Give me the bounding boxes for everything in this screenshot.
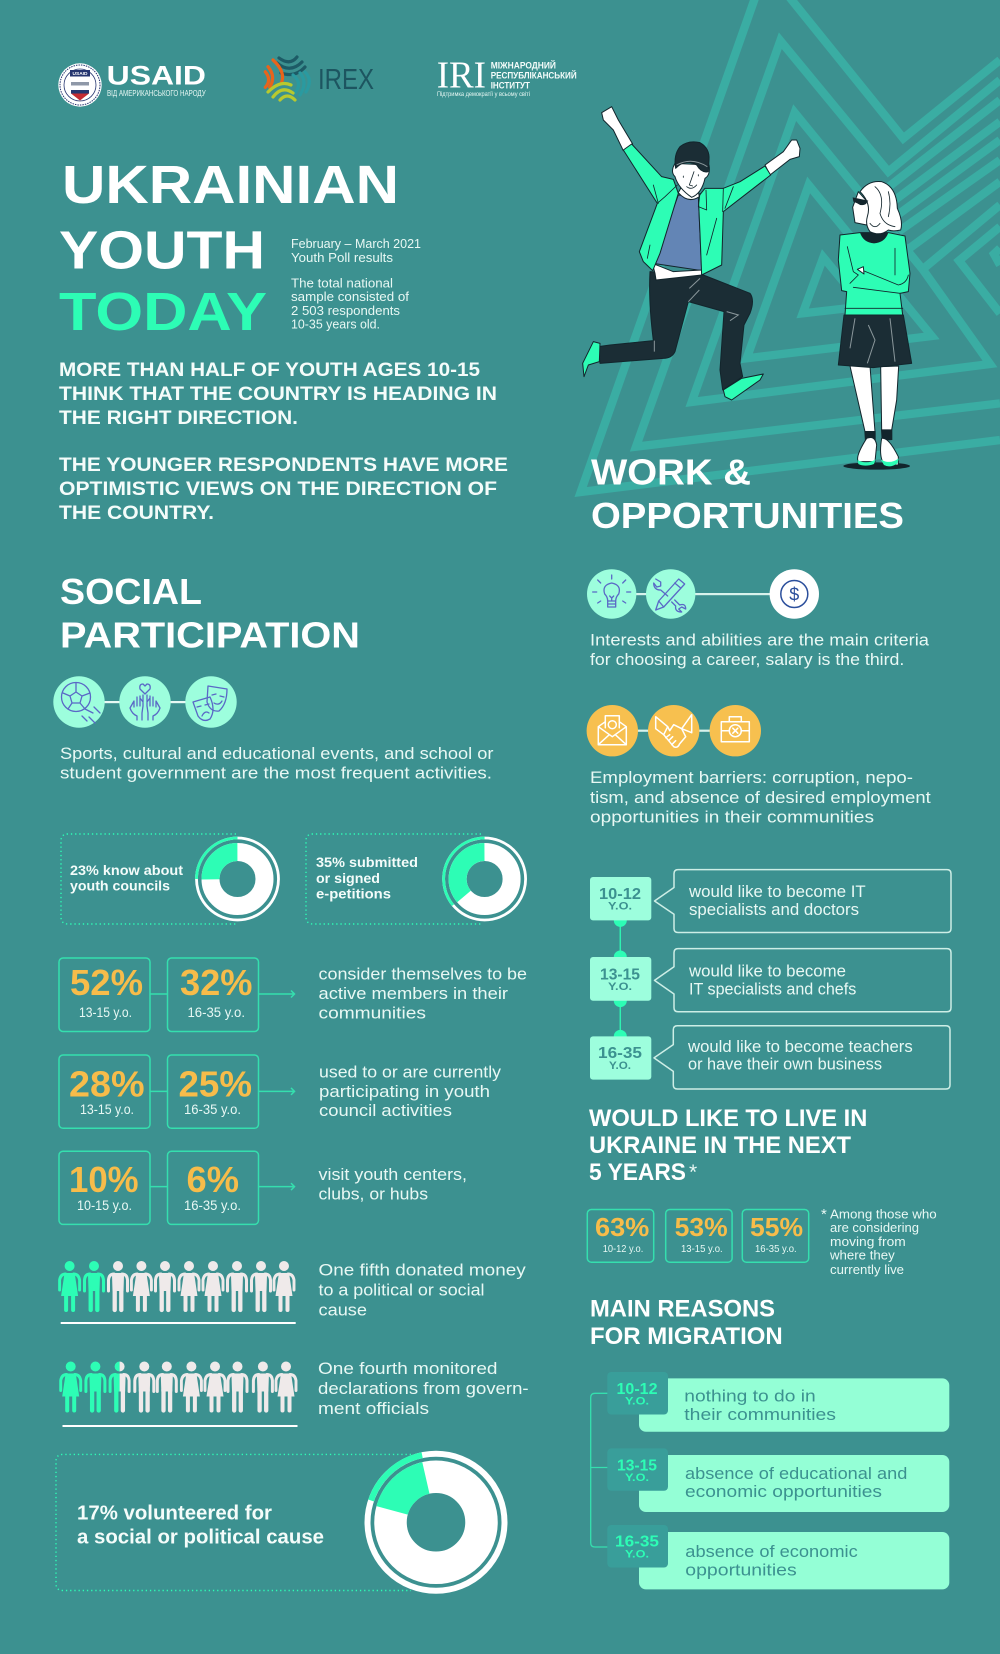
footnote: moving from bbox=[830, 1235, 906, 1249]
socks bbox=[864, 429, 892, 442]
text: employment barriers: opportunities in their communities bbox=[590, 808, 874, 826]
pants bbox=[598, 272, 752, 390]
heading: would like to live in Ukraine: UKRAINE IN THE NEXT bbox=[589, 1132, 851, 1159]
speech bubble: 16-35: or have their own business bbox=[688, 1056, 882, 1074]
pictogram: one fifth donated bbox=[60, 1261, 527, 1324]
donut chart bbox=[196, 838, 278, 920]
reason 10-12 bbox=[607, 1372, 949, 1432]
age block 10-12: 10-12 bbox=[599, 886, 641, 903]
arrow bbox=[150, 1183, 294, 1190]
icon: theatre masks bbox=[185, 676, 237, 728]
survey details: February – March 2021 bbox=[291, 236, 421, 251]
heading: social participation: PARTICIPATION bbox=[60, 614, 360, 656]
text: career criteria: Interests and abilities are the main criteria bbox=[590, 631, 930, 649]
label bbox=[77, 1502, 324, 1548]
description: visit youth centers, bbox=[318, 1166, 467, 1184]
speech bubble: 13-15: would like to become bbox=[688, 962, 846, 980]
survey details: The total national bbox=[291, 276, 393, 290]
age block 10-12 bbox=[590, 877, 651, 920]
stat box: 16-35 stay: 16-35 y.o. bbox=[755, 1243, 797, 1255]
footnote: currently live bbox=[830, 1263, 904, 1277]
label: youth councils bbox=[70, 878, 170, 894]
reason 10-12: nothing to do in bbox=[684, 1387, 816, 1405]
speech bubble: 10-12: would like to become IT bbox=[688, 883, 866, 901]
description: cause bbox=[318, 1302, 367, 1320]
description: declarations from govern- bbox=[318, 1380, 529, 1398]
logo: IRI bbox=[437, 55, 577, 98]
text: employment barriers: Employment barriers: corruption, nepo- bbox=[590, 769, 913, 787]
IREX wordmark: IREX bbox=[318, 64, 374, 96]
arrow bbox=[150, 990, 294, 998]
IRI name: МІЖНАРОДНИЙ bbox=[491, 59, 556, 71]
stat box: 10-12 stay: 10-12 y.o. bbox=[603, 1243, 643, 1255]
reason 10-12: 10-12 bbox=[616, 1381, 658, 1398]
description bbox=[318, 966, 527, 1022]
heading: work and opportunities: WORK & bbox=[591, 452, 751, 492]
belt bbox=[652, 263, 702, 280]
text: frequent activities bbox=[60, 745, 494, 782]
shadow bbox=[843, 462, 910, 470]
description: used to or are currently bbox=[319, 1064, 502, 1082]
stat box: 13-15 stay: 53% bbox=[675, 1214, 728, 1242]
description: participating in youth bbox=[319, 1083, 490, 1101]
age block 16-35: 16-35 bbox=[598, 1045, 642, 1062]
survey details: sample consisted of bbox=[291, 289, 409, 304]
numbers bbox=[69, 1063, 252, 1117]
key findings: THE COUNTRY. bbox=[59, 503, 214, 524]
description: One fifth donated money bbox=[318, 1262, 527, 1280]
speech bubble: 16-35 bbox=[654, 1026, 950, 1089]
heading: would like to live in Ukraine bbox=[589, 1105, 867, 1186]
icon: USAID seal: USAID bbox=[73, 71, 88, 77]
footnote: Among those who bbox=[830, 1207, 937, 1221]
survey details: 2 503 respondents bbox=[291, 303, 400, 318]
description: communities bbox=[318, 1004, 426, 1022]
key findings: OPTIMISTIC VIEWS ON THE DIRECTION OF bbox=[59, 479, 497, 500]
label: 35% submitted bbox=[316, 854, 418, 870]
stat box: 13-15 stay bbox=[666, 1210, 732, 1262]
stat row: youth centers bbox=[59, 1151, 467, 1224]
collar bbox=[860, 233, 888, 243]
icon: dollar coin bbox=[770, 569, 819, 619]
reason 16-35: opportunities bbox=[685, 1561, 797, 1579]
label: e-petitions bbox=[316, 886, 391, 902]
icon: envelope with money bbox=[587, 705, 638, 756]
speech bubble: 10-12: specialists and doctors bbox=[689, 901, 859, 919]
key findings: THINK THAT THE COUNTRY IS HEADING IN bbox=[59, 384, 497, 405]
stat box: 16-35 stay bbox=[742, 1210, 809, 1262]
illustration: woman with crossed arms bbox=[838, 181, 912, 470]
icon: pencil and wrench bbox=[646, 569, 695, 619]
shoes bbox=[858, 437, 898, 465]
face bbox=[683, 172, 698, 188]
heading: social participation bbox=[60, 571, 360, 656]
reason 16-35: 16-35 bbox=[615, 1534, 659, 1551]
icon: light bulb bbox=[587, 569, 636, 619]
text: employment barriers bbox=[590, 769, 931, 826]
sunglasses bbox=[853, 197, 868, 205]
donut chart bbox=[427, 821, 542, 937]
numbers: 16-35 y.o. bbox=[184, 1198, 241, 1213]
description: active members in their bbox=[318, 985, 509, 1003]
title: TODAY bbox=[59, 282, 267, 342]
heading: main reasons for migration: MAIN REASONS bbox=[590, 1296, 775, 1323]
label: 23% know about bbox=[70, 862, 183, 878]
label: or signed bbox=[316, 870, 380, 886]
reason 13-15 bbox=[607, 1448, 949, 1512]
donut chart bbox=[349, 1435, 523, 1609]
illustration: jumping man bbox=[583, 107, 800, 400]
speech bubble: 13-15: IT specialists and chefs bbox=[689, 980, 856, 998]
age block 16-35: Y.O. bbox=[609, 1060, 631, 1072]
career criteria icons row bbox=[587, 569, 819, 619]
footnote bbox=[821, 1206, 937, 1277]
icon: IREX arcs bbox=[265, 57, 309, 100]
heading: social participation: SOCIAL bbox=[60, 571, 202, 612]
logo: IREX bbox=[265, 57, 374, 100]
age block 13-15: Y.O. bbox=[608, 981, 632, 993]
description: to a political or social bbox=[318, 1281, 484, 1299]
speech bubble: 10-12 bbox=[654, 870, 951, 932]
footnote: where they bbox=[829, 1249, 895, 1263]
timeline: career wishes by age bbox=[590, 870, 951, 1089]
jacket bbox=[623, 144, 678, 271]
icon: briefcase with cross bbox=[710, 705, 761, 756]
stat box: 13-15 stay: 13-15 y.o. bbox=[681, 1243, 723, 1255]
icon: handshake bbox=[648, 705, 699, 756]
survey details: 10-35 years old. bbox=[291, 316, 380, 332]
reason 10-12: Y.O. bbox=[625, 1396, 649, 1408]
speech bubble: 16-35: would like to become teachers bbox=[687, 1038, 913, 1056]
reason 13-15: absence of educational and bbox=[685, 1465, 907, 1483]
sweater bbox=[838, 233, 910, 315]
description bbox=[318, 1360, 529, 1418]
description bbox=[319, 1064, 502, 1120]
description bbox=[318, 1166, 467, 1204]
heading: would like to live in Ukraine: 5 YEARS bbox=[589, 1159, 686, 1186]
description: ment officials bbox=[318, 1400, 429, 1418]
footnote: are considering bbox=[830, 1221, 919, 1235]
skirt bbox=[838, 315, 912, 368]
numbers: 32% bbox=[180, 962, 252, 1003]
shoes bbox=[583, 342, 763, 400]
reason 10-12: their communities bbox=[684, 1406, 836, 1424]
label bbox=[316, 854, 418, 902]
footnote: * bbox=[821, 1206, 827, 1223]
collar bbox=[678, 187, 699, 200]
logo: USAID bbox=[58, 60, 206, 107]
reason 16-35 bbox=[607, 1525, 949, 1589]
pictogram: one fourth monitored bbox=[61, 1360, 529, 1427]
key findings: MORE THAN HALF OF YOUTH AGES 10-15 bbox=[59, 360, 480, 381]
t-shirt bbox=[653, 195, 702, 271]
text: frequent activities: Sports, cultural and educational events, and school or bbox=[60, 745, 494, 763]
reason 13-15: Y.O. bbox=[625, 1472, 649, 1484]
text: career criteria: for choosing a career, salary is the third. bbox=[590, 651, 904, 669]
numbers: 16-35 y.o. bbox=[188, 1005, 245, 1020]
age block 16-35 bbox=[590, 1036, 651, 1080]
survey details bbox=[291, 236, 421, 332]
USAID wordmark: USAID bbox=[107, 60, 206, 90]
bracket connector bbox=[591, 1393, 608, 1547]
survey details: Youth Poll results bbox=[291, 250, 393, 265]
activity icons row bbox=[53, 676, 237, 728]
stat box: 16-35 stay: 55% bbox=[750, 1214, 803, 1242]
heading: work and opportunities bbox=[591, 452, 904, 536]
reason 13-15: economic opportunities bbox=[685, 1483, 882, 1501]
callout: youth councils donut bbox=[61, 834, 278, 924]
label: a social or political cause bbox=[77, 1526, 324, 1548]
numbers: 10% bbox=[69, 1159, 139, 1200]
forearms and hands bbox=[602, 107, 633, 151]
title: UKRAINIAN bbox=[62, 155, 399, 215]
numbers: 28% bbox=[69, 1063, 145, 1104]
reason 16-35: Y.O. bbox=[625, 1549, 649, 1561]
head bbox=[672, 163, 709, 197]
reason 16-35: absence of economic bbox=[685, 1543, 858, 1561]
background triangle pattern bbox=[581, 0, 1000, 492]
numbers: 10-15 y.o. bbox=[77, 1198, 132, 1213]
label: 17% volunteered for bbox=[77, 1502, 272, 1524]
IRI serif mark: IRI bbox=[437, 55, 486, 97]
description: consider themselves to be bbox=[318, 966, 527, 984]
numbers bbox=[69, 1159, 241, 1213]
face bbox=[853, 192, 872, 225]
stat box: 10-12 stay: 63% bbox=[595, 1214, 649, 1242]
heading: would like to live in Ukraine: WOULD LIKE TO LIVE IN bbox=[589, 1105, 867, 1132]
key findings: THE YOUNGER RESPONDENTS HAVE MORE bbox=[59, 455, 508, 476]
heading: would like to live in Ukraine: * bbox=[689, 1161, 697, 1184]
age block 10-12: Y.O. bbox=[608, 901, 632, 913]
label bbox=[70, 862, 183, 894]
numbers: 13-15 y.o. bbox=[79, 1005, 132, 1020]
numbers: 6% bbox=[186, 1159, 239, 1200]
icon: hands and heart bbox=[119, 676, 171, 728]
age block 13-15 bbox=[590, 957, 651, 1001]
key findings bbox=[59, 360, 508, 524]
stat box: 10-12 stay bbox=[587, 1210, 654, 1262]
reason 13-15: 13-15 bbox=[617, 1457, 657, 1474]
heading: main reasons for migration: FOR MIGRATION bbox=[590, 1323, 783, 1350]
icon: USAID seal bbox=[58, 63, 102, 107]
IRI tagline: Підтримка демократії у всьому світі bbox=[437, 90, 530, 98]
legs bbox=[850, 366, 899, 432]
employment barrier icons row bbox=[587, 705, 761, 756]
connector bbox=[614, 914, 627, 1043]
numbers: 52% bbox=[70, 962, 143, 1003]
USAID tagline: ВІД АМЕРИКАНСЬКОГО НАРОДУ bbox=[107, 89, 206, 98]
IRI name bbox=[491, 59, 577, 91]
callout: e-petitions donut bbox=[306, 821, 542, 937]
IRI name: ІНСТИТУТ bbox=[491, 80, 530, 91]
title: YOUTH bbox=[59, 220, 265, 280]
age block 13-15: 13-15 bbox=[600, 966, 640, 983]
numbers bbox=[70, 962, 252, 1020]
numbers: 13-15 y.o. bbox=[80, 1102, 134, 1117]
description bbox=[318, 1262, 527, 1320]
numbers: 16-35 y.o. bbox=[184, 1102, 241, 1117]
callout: volunteered donut bbox=[56, 1435, 523, 1609]
description: One fourth monitored bbox=[318, 1360, 498, 1378]
heading: work and opportunities: OPPORTUNITIES bbox=[591, 495, 904, 536]
description: council activities bbox=[319, 1102, 452, 1120]
text: employment barriers: tism, and absence of desired employment bbox=[590, 789, 931, 807]
heading: main reasons for migration bbox=[590, 1296, 783, 1350]
migration reasons list bbox=[591, 1372, 949, 1589]
text: frequent activities: student government are the most frequent activities. bbox=[60, 764, 492, 782]
IRI name: РЕСПУБЛІКАНСЬКИЙ bbox=[491, 69, 577, 81]
stat row: active members bbox=[59, 958, 527, 1032]
arrow bbox=[150, 1088, 294, 1095]
icon: dollar coin: $ bbox=[789, 584, 799, 604]
numbers: 25% bbox=[178, 1063, 252, 1104]
text: career criteria bbox=[590, 631, 930, 669]
icon: soccer ball bbox=[53, 676, 105, 728]
title bbox=[59, 155, 399, 342]
stat row: youth council activities bbox=[59, 1055, 502, 1128]
key findings: THE RIGHT DIRECTION. bbox=[59, 408, 298, 429]
speech bubble: 13-15 bbox=[654, 949, 951, 1012]
hair bbox=[860, 181, 901, 234]
description: clubs, or hubs bbox=[318, 1186, 428, 1204]
cap bbox=[675, 142, 709, 172]
